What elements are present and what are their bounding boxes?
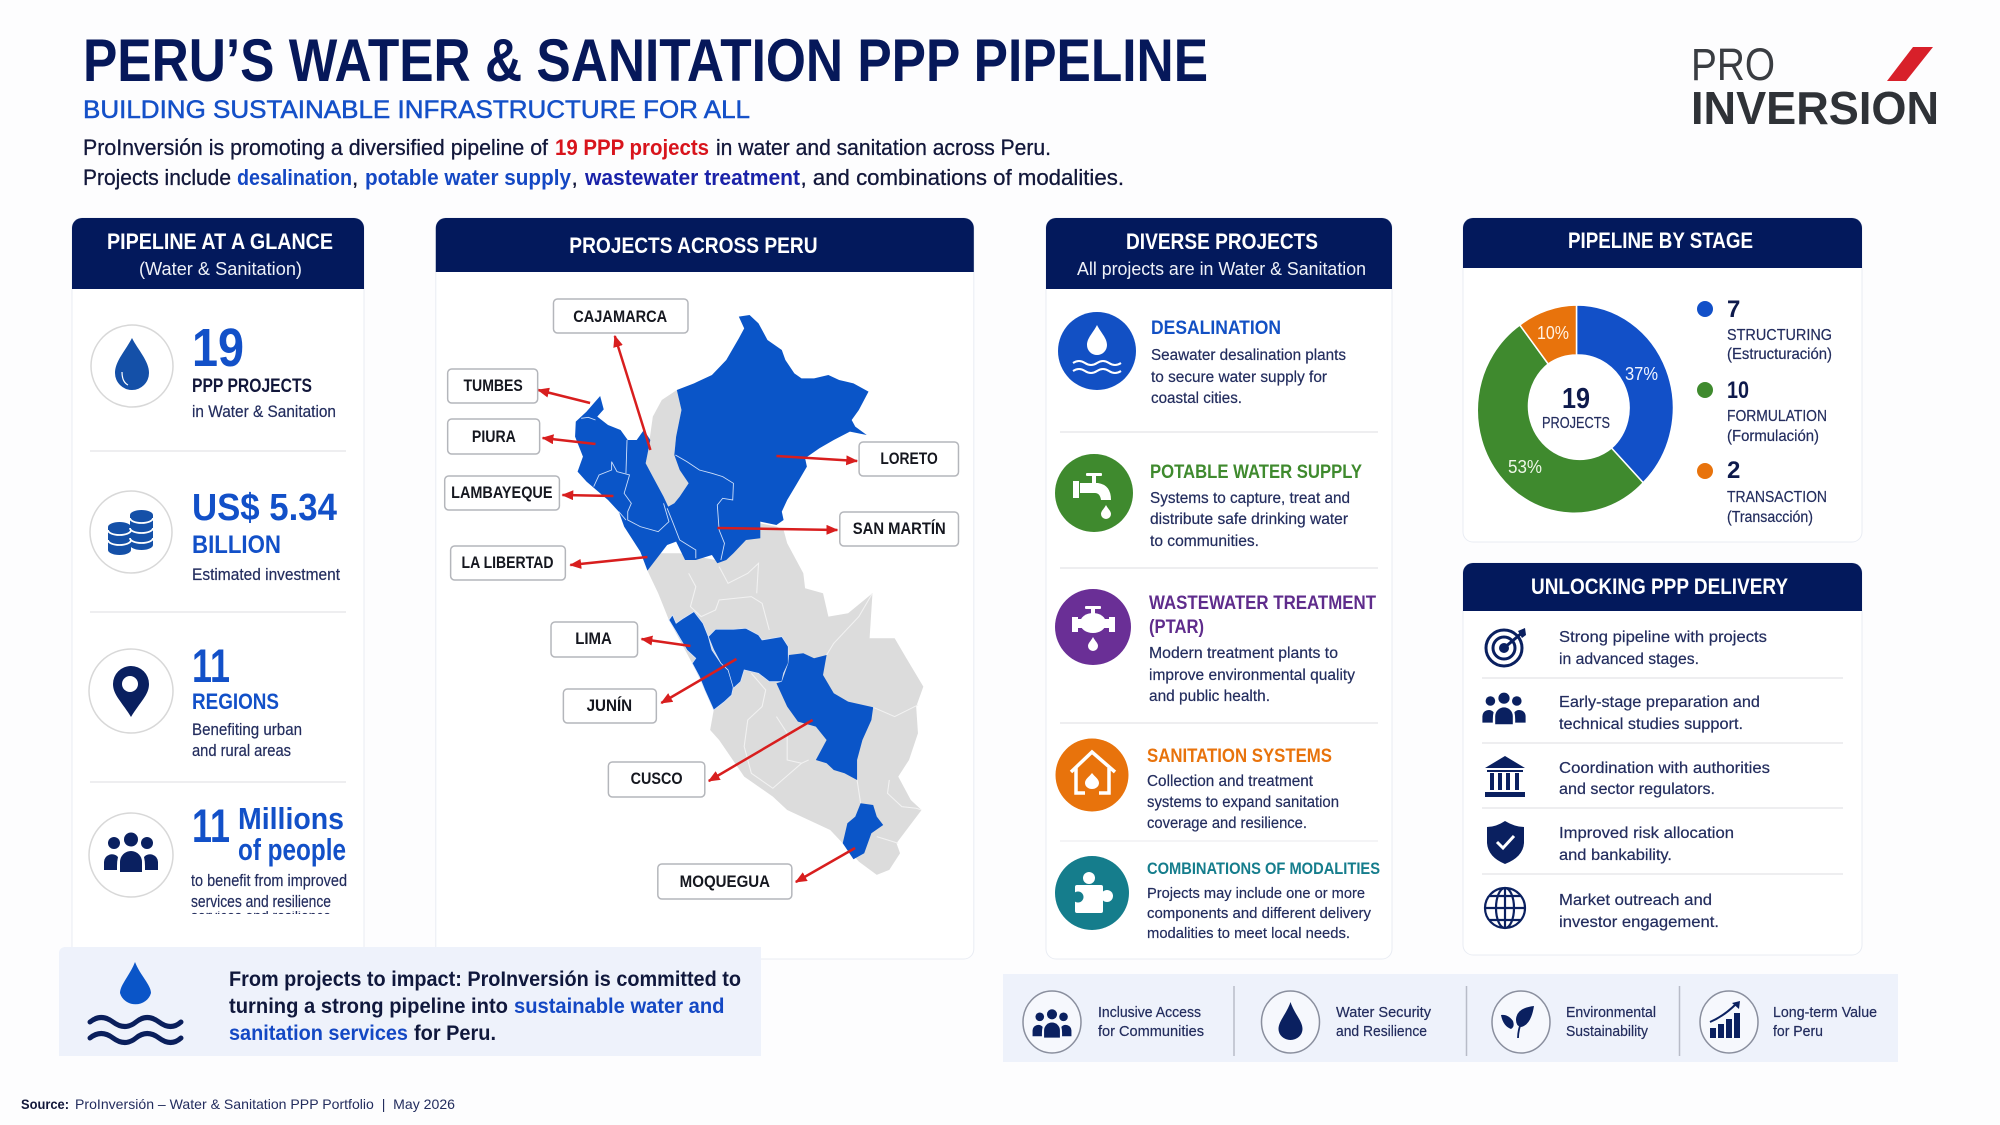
item: strong pipeline: in advanced stages. — [1559, 651, 1699, 668]
item: combinations of modalities: modalities to meet local needs. — [1147, 925, 1350, 942]
legend: 10 — [1727, 377, 1749, 404]
callout text — [229, 967, 741, 1045]
map labels: LIMA — [575, 630, 612, 648]
source line: Source: — [21, 1096, 69, 1112]
item: coordination with authorities: Coordination with authorities — [1559, 760, 1770, 777]
source line: ProInversión – Water & Sanitation PPP Portfolio | May 2026 — [75, 1096, 455, 1112]
legend — [1697, 296, 1832, 526]
benefit: long-term value: for Peru — [1773, 1024, 1823, 1040]
item: sanitation systems — [1056, 738, 1339, 832]
intro text: , — [572, 165, 578, 190]
panel header: pipeline at a glance: PIPELINE AT A GLANCE — [107, 229, 333, 254]
panel header: pipeline at a glance — [72, 218, 364, 289]
map: grey regions — [646, 390, 923, 875]
item: desalination: Seawater desalination plants — [1151, 347, 1346, 364]
map labels: LAMBAYEQUE — [451, 484, 553, 502]
stat: 11 millions of people — [88, 807, 346, 914]
intro text — [83, 135, 1124, 190]
item: wastewater treatment: WASTEWATER TREATMENT — [1149, 593, 1376, 614]
item: sanitation systems: SANITATION SYSTEMS — [1147, 746, 1332, 767]
map labels: MOQUEGUA — [680, 873, 770, 891]
map labels: PIURA — [472, 428, 516, 446]
panel header: diverse projects — [1046, 218, 1392, 289]
map: highlighted northern regions — [575, 315, 869, 571]
stat: 11 regions: 11 — [192, 639, 230, 692]
panel: pipeline at a glance — [72, 218, 364, 958]
intro text: , — [352, 165, 358, 190]
legend: TRANSACTION — [1727, 489, 1827, 506]
legend: (Formulación) — [1727, 428, 1819, 445]
panel header: unlocking PPP delivery — [1463, 563, 1862, 611]
donut chart: 53% — [1508, 457, 1542, 477]
benefit: inclusive access: for Communities — [1098, 1024, 1204, 1040]
item: coordination with authorities — [1485, 756, 1770, 798]
map of Peru — [575, 315, 923, 875]
item: potable water supply — [1055, 454, 1362, 550]
legend: 7 — [1727, 296, 1740, 323]
item: potable water supply: POTABLE WATER SUPPLY — [1150, 462, 1362, 483]
logo: ProInversion: INVERSION — [1691, 82, 1939, 134]
item: combinations of modalities — [1055, 856, 1380, 942]
icon: water drop and waves — [90, 962, 181, 1042]
item: potable water supply: Systems to capture, treat and — [1150, 490, 1350, 507]
intro text: Projects include — [83, 165, 231, 190]
subtitle: BUILDING SUSTAINABLE INFRASTRUCTURE FOR ALL — [83, 96, 750, 124]
item: improved risk allocation: and bankability. — [1559, 847, 1672, 864]
intro text: wastewater treatment — [584, 165, 800, 190]
map arrows — [538, 336, 857, 882]
callout text: From projects to impact: ProInversión is committed to — [229, 967, 741, 991]
stat: US$ 5.34 billion — [90, 487, 340, 584]
benefit: long-term value — [1700, 991, 1877, 1053]
strip: benefits — [1003, 974, 1898, 1062]
benefit: long-term value: Long-term Value — [1773, 1005, 1877, 1021]
benefit: inclusive access: Inclusive Access — [1098, 1005, 1201, 1021]
stat: 11 millions of people: services and resilience — [191, 908, 331, 926]
panel header: pipeline by stage: PIPELINE BY STAGE — [1568, 228, 1753, 253]
intro text: 19 PPP projects — [555, 135, 709, 160]
callout text: sanitation services — [229, 1021, 408, 1045]
item: potable water supply: distribute safe drinking water — [1150, 511, 1348, 528]
stat: 19 PPP projects — [91, 318, 336, 421]
item: market outreach: investor engagement. — [1559, 914, 1719, 931]
donut chart: 19 — [1562, 383, 1590, 415]
map: region borders — [581, 417, 733, 560]
panel header: projects across Peru — [436, 218, 974, 272]
map labels: CUSCO — [631, 770, 683, 788]
map: highlighted southern regions — [669, 612, 883, 859]
item: early-stage preparation — [1482, 693, 1760, 733]
legend: FORMULATION — [1727, 408, 1827, 425]
benefit: environmental sustainability: Environmental — [1566, 1005, 1656, 1021]
stat: 11 regions: REGIONS — [192, 689, 279, 714]
stat: 11 millions of people: services and resilience — [191, 893, 331, 911]
map labels: CAJAMARCA — [573, 308, 667, 326]
item: desalination: to secure water supply for — [1151, 369, 1327, 386]
item: market outreach: Market outreach and — [1559, 892, 1712, 909]
item: sanitation systems: coverage and resilience. — [1147, 815, 1307, 832]
benefit: environmental sustainability — [1492, 991, 1656, 1053]
donut chart: PROJECTS — [1542, 415, 1610, 432]
stat: US$ 5.34 billion: US$ 5.34 — [192, 487, 337, 529]
item: improved risk allocation — [1487, 821, 1734, 864]
legend: STRUCTURING — [1727, 327, 1832, 344]
intro text: , and combinations of modalities. — [800, 165, 1124, 190]
item: wastewater treatment: (PTAR) — [1149, 617, 1204, 638]
logo: ProInversion — [1691, 39, 1939, 134]
callout text: turning a strong pipeline into — [229, 994, 508, 1018]
stat: 11 millions of people: 11 — [192, 799, 230, 852]
benefit: water security: Water Security — [1336, 1005, 1432, 1021]
panel header: unlocking PPP delivery: UNLOCKING PPP DELIVERY — [1531, 574, 1788, 599]
map labels — [445, 299, 958, 899]
panel header: diverse projects: All projects are in Water & Sanitation — [1077, 259, 1366, 279]
intro text: ProInversión is promoting a diversified pipeline of — [83, 135, 549, 160]
item: desalination — [1058, 312, 1346, 407]
panel header: pipeline by stage — [1463, 218, 1862, 268]
stat: 19 PPP projects: 19 — [192, 318, 244, 378]
benefit: water security: and Resilience — [1336, 1024, 1427, 1040]
item: combinations of modalities: COMBINATIONS OF MODALITIES — [1147, 860, 1380, 878]
panel header: projects across Peru: PROJECTS ACROSS PERU — [569, 233, 818, 258]
item: strong pipeline: Strong pipeline with projects — [1559, 629, 1767, 646]
stat: US$ 5.34 billion: BILLION — [192, 531, 281, 559]
stat: 11 millions of people: Millions — [238, 801, 344, 836]
intro text: in water and sanitation across Peru. — [716, 135, 1051, 160]
map labels: SAN MARTÍN — [853, 519, 946, 538]
item: strong pipeline — [1486, 628, 1767, 668]
stat: 11 regions: Benefiting urban — [192, 721, 302, 739]
benefit: water security — [1262, 991, 1432, 1053]
stat: 11 millions of people: of people — [238, 832, 346, 867]
item: coordination with authorities: and sector regulators. — [1559, 781, 1715, 798]
item: market outreach — [1485, 888, 1719, 931]
item: desalination: DESALINATION — [1151, 318, 1281, 339]
panel: diverse projects — [1046, 218, 1392, 959]
logo: ProInversion: PRO — [1691, 39, 1775, 90]
callout: from projects to impact — [59, 947, 761, 1056]
map labels: LORETO — [880, 450, 938, 468]
legend: (Estructuración) — [1727, 346, 1832, 363]
map labels: JUNÍN — [587, 696, 632, 715]
map labels: TUMBES — [463, 377, 523, 395]
donut chart — [1477, 305, 1673, 513]
item: potable water supply: to communities. — [1150, 533, 1259, 550]
item: wastewater treatment: and public health. — [1149, 688, 1270, 705]
item: wastewater treatment — [1055, 589, 1376, 705]
stat: 19 PPP projects: PPP PROJECTS — [192, 375, 312, 397]
callout text: for Peru. — [414, 1021, 496, 1045]
legend: 2 — [1727, 457, 1740, 484]
panel: pipeline by stage — [1463, 218, 1862, 542]
item: early-stage preparation: Early-stage preparation and — [1559, 694, 1760, 711]
item: wastewater treatment: Modern treatment plants to — [1149, 645, 1338, 662]
benefit: environmental sustainability: Sustainability — [1566, 1024, 1649, 1040]
item: improved risk allocation: Improved risk allocation — [1559, 825, 1734, 842]
intro text: potable water supply — [365, 165, 571, 190]
item: combinations of modalities: Projects may include one or more — [1147, 885, 1365, 902]
map labels: LA LIBERTAD — [462, 554, 554, 572]
callout text: sustainable water and — [514, 994, 724, 1018]
stat: US$ 5.34 billion: Estimated investment — [192, 566, 340, 584]
item: sanitation systems: systems to expand sanitation — [1147, 794, 1339, 811]
donut chart: 37% — [1625, 364, 1658, 384]
panel: projects across Peru — [436, 218, 974, 959]
title: PERU’S WATER & SANITATION PPP PIPELINE — [83, 27, 1208, 94]
panel: unlocking PPP delivery — [1463, 563, 1862, 955]
item: wastewater treatment: improve environmental quality — [1149, 667, 1355, 684]
donut chart: 10% — [1537, 323, 1569, 343]
item: desalination: coastal cities. — [1151, 390, 1242, 407]
stat: 11 regions: and rural areas — [192, 742, 291, 760]
item: combinations of modalities: components and different delivery — [1147, 905, 1371, 922]
item: sanitation systems: Collection and treatment — [1147, 773, 1314, 790]
panel header: diverse projects: DIVERSE PROJECTS — [1126, 229, 1318, 254]
stat: 19 PPP projects: in Water & Sanitation — [192, 403, 336, 421]
stat: 11 regions — [89, 639, 302, 760]
panel header: pipeline at a glance: (Water & Sanitation) — [139, 259, 302, 279]
item: early-stage preparation: technical studies support. — [1559, 716, 1743, 733]
intro text: desalination — [237, 165, 352, 190]
stat: 11 millions of people: to benefit from improved — [191, 872, 347, 890]
benefit: inclusive access — [1023, 991, 1204, 1053]
legend: (Transacción) — [1727, 509, 1813, 526]
